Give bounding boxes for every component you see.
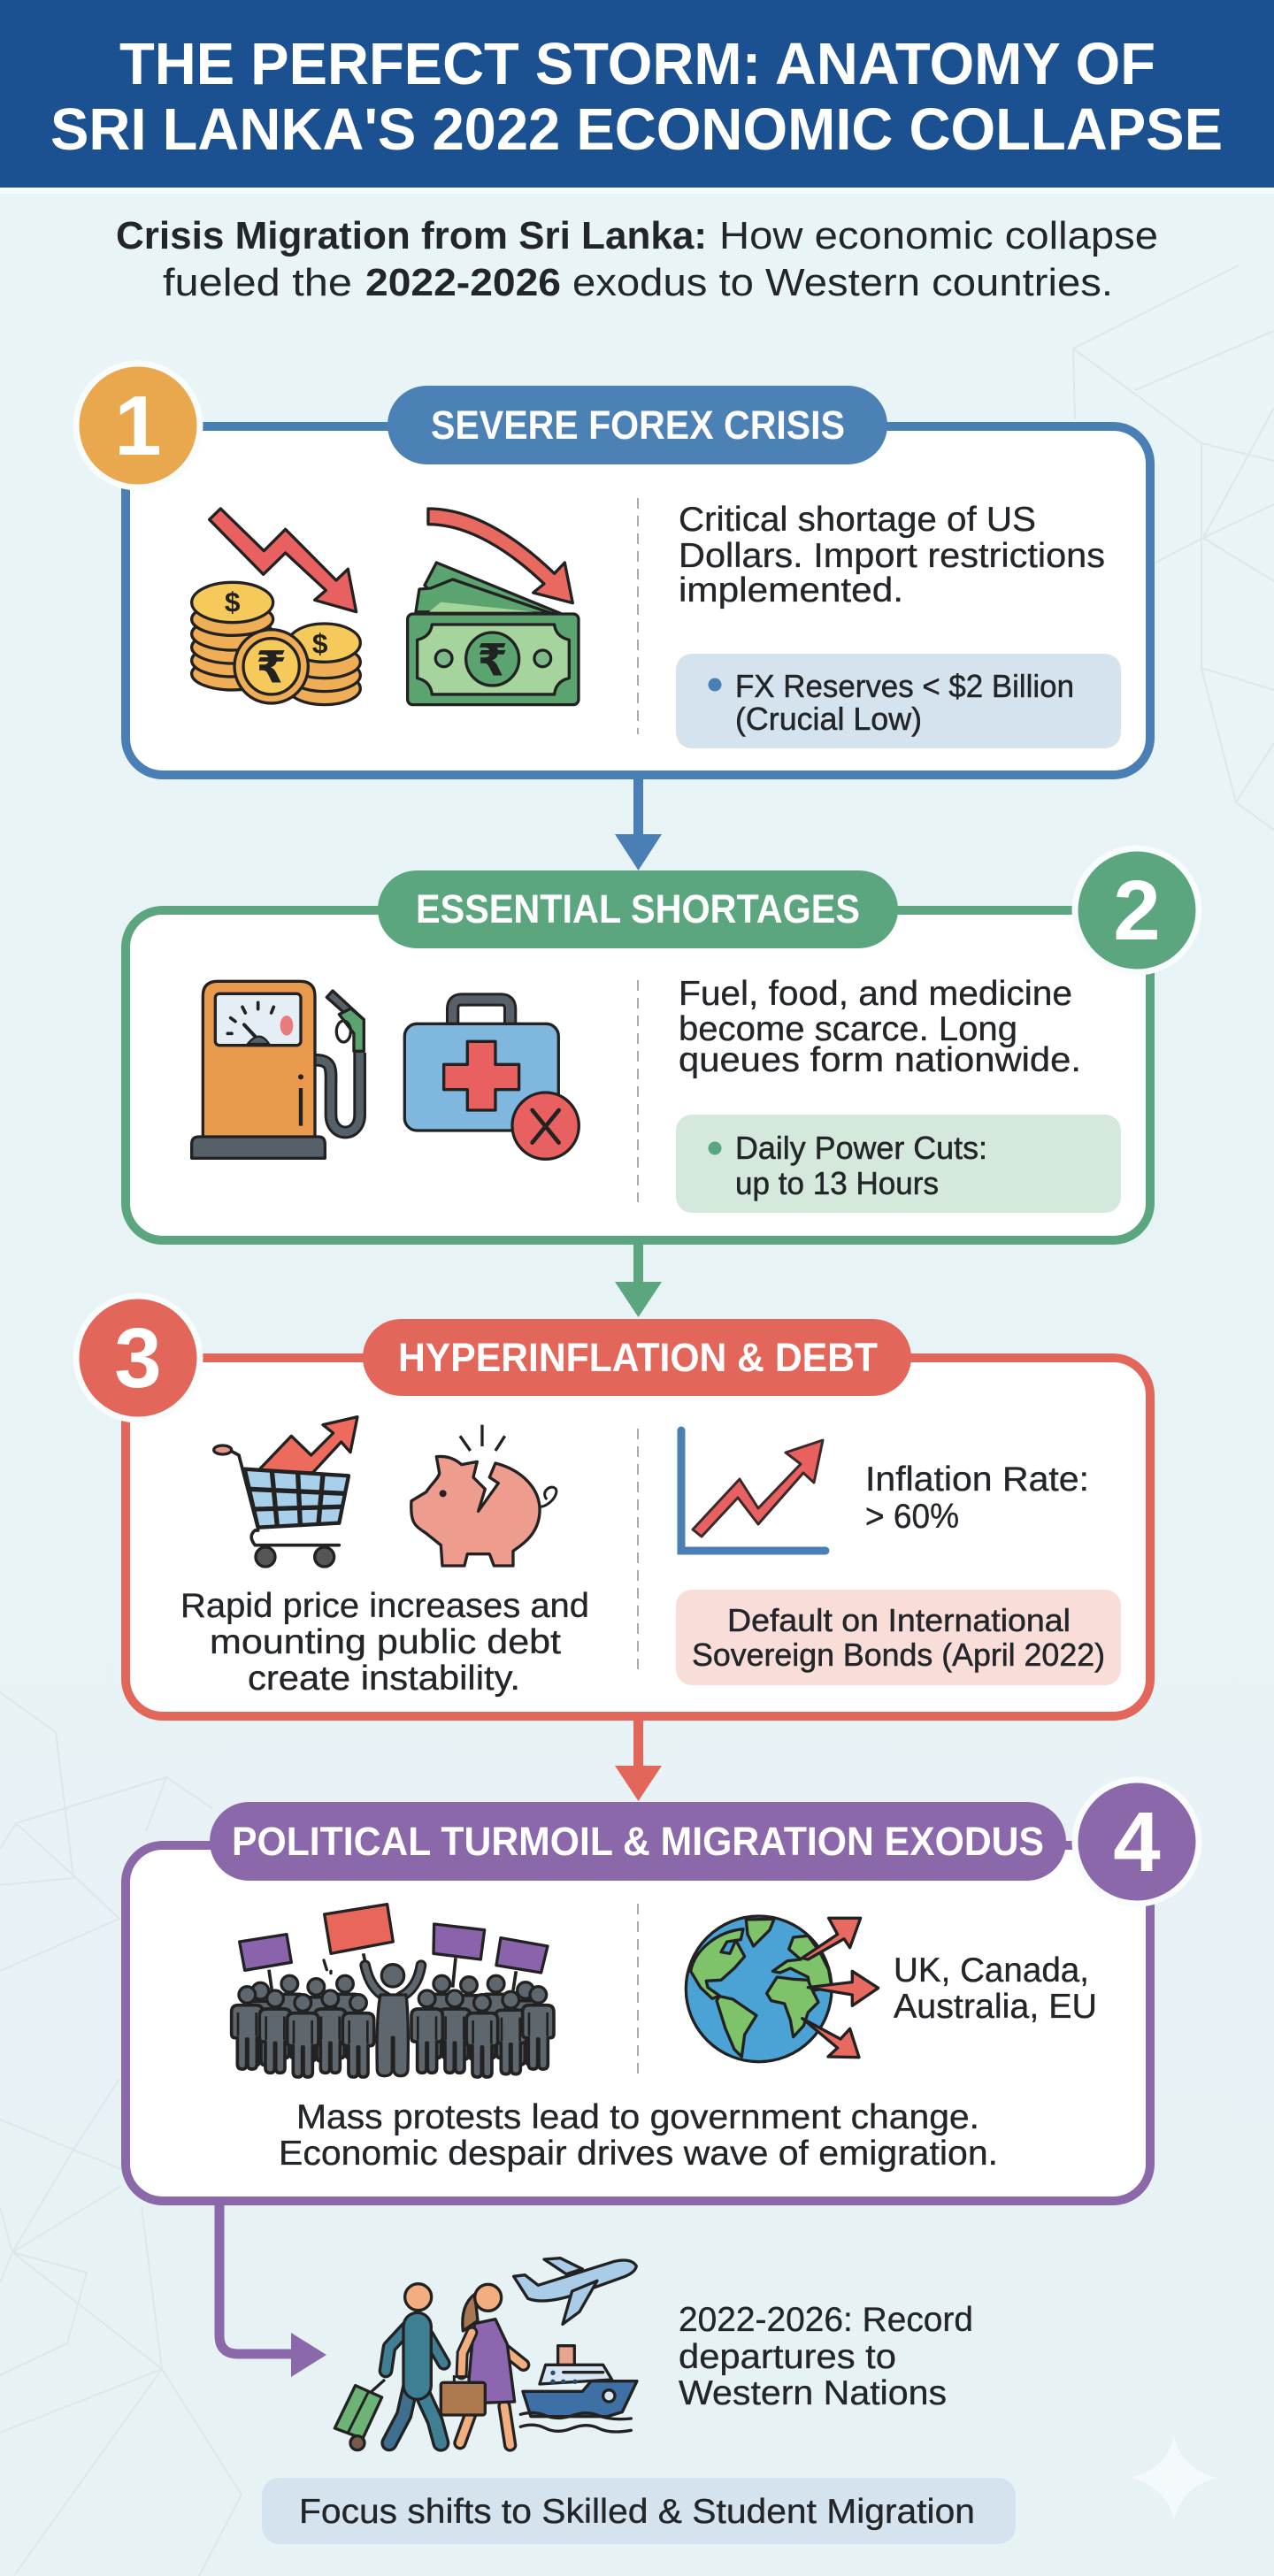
man bbox=[386, 2327, 444, 2443]
stat box: power cuts bbox=[676, 1115, 1121, 1213]
arrow: panel 1 to panel 2 bbox=[615, 777, 662, 870]
panel 3 heading pill: HYPERINFLATION & DEBT bbox=[398, 1335, 878, 1380]
panel 1 heading pill bbox=[388, 386, 887, 464]
subtitle: fueled the bbox=[163, 261, 352, 304]
icon: medical kit with cross-out bbox=[404, 1000, 579, 1159]
panel 4 description: Economic despair drives wave of emigration. bbox=[279, 2135, 998, 2173]
panel 2: essential shortages bbox=[126, 848, 1199, 1240]
panel 3 heading pill bbox=[363, 1319, 911, 1396]
divider bbox=[637, 980, 639, 1202]
arrow: panel 3 to panel 4 bbox=[615, 1718, 662, 1801]
icon: broken piggy bank bbox=[411, 1425, 556, 1566]
green suitcase bbox=[334, 2380, 385, 2450]
ship bbox=[520, 2346, 637, 2432]
icon: falling banknotes: ₹ bbox=[477, 635, 508, 685]
icon: shopping cart with rising arrow bbox=[214, 1417, 357, 1567]
subtitle: Crisis Migration from Sri Lanka: bbox=[116, 214, 707, 257]
stat box: sovereign default bbox=[676, 1590, 1121, 1685]
inflation rate label: Inflation Rate: bbox=[865, 1460, 1089, 1499]
panel 2 description bbox=[679, 975, 1081, 1079]
callout: skilled and student migration bbox=[262, 2478, 1016, 2544]
departures caption: departures to bbox=[679, 2338, 896, 2376]
stat box: FX reserves bbox=[676, 654, 1121, 748]
stat box: power cuts: Daily Power Cuts: bbox=[735, 1130, 987, 1166]
panel 4 description: Mass protests lead to government change. bbox=[296, 2098, 979, 2136]
panel 4 description bbox=[279, 2098, 998, 2173]
departures caption: 2022-2026: Record bbox=[679, 2301, 973, 2339]
departures caption: Western Nations bbox=[679, 2374, 947, 2412]
divider bbox=[637, 498, 639, 734]
icon: falling coins bbox=[192, 509, 360, 705]
header banner bbox=[0, 0, 1274, 194]
panel 1 description: Dollars. Import restrictions bbox=[679, 537, 1105, 575]
subtitle: 2022-2026 bbox=[365, 261, 561, 304]
panel 1 description: implemented. bbox=[679, 571, 903, 610]
destination countries bbox=[894, 1951, 1097, 2026]
briefcase bbox=[454, 2377, 469, 2382]
subtitle bbox=[116, 214, 1158, 304]
panel 2 heading pill bbox=[378, 870, 898, 948]
callout: skilled and student migration: Focus shifts to Skilled & Student Migration bbox=[299, 2493, 975, 2531]
stat box: FX reserves: (Crucial Low) bbox=[735, 701, 922, 737]
divider bbox=[637, 1429, 639, 1670]
destination countries: UK, Canada, bbox=[894, 1951, 1089, 1990]
stat box: sovereign default: Default on International bbox=[727, 1602, 1071, 1638]
panel 3 description: mounting public debt bbox=[210, 1623, 561, 1661]
badge 4: 4 bbox=[1113, 1795, 1161, 1890]
stat box: sovereign default: Sovereign Bonds (April 2022) bbox=[692, 1637, 1105, 1673]
title bbox=[50, 31, 1223, 163]
badge 1: 1 bbox=[114, 379, 162, 473]
line chart: rising inflation bbox=[681, 1430, 825, 1551]
panel 3 description: create instability. bbox=[248, 1660, 520, 1698]
arrow: panel 4 to departures bbox=[219, 2203, 326, 2377]
badge 4 bbox=[1075, 1780, 1199, 1904]
destination countries: Australia, EU bbox=[894, 1988, 1097, 2026]
panel 2 description: become scarce. Long bbox=[679, 1010, 1017, 1048]
panel 1 frame bbox=[126, 426, 1150, 775]
panel 2 description: Fuel, food, and medicine bbox=[679, 975, 1072, 1013]
panel 3 description bbox=[180, 1587, 589, 1698]
badge 3: 3 bbox=[114, 1311, 162, 1406]
subtitle: exodus to Western countries. bbox=[572, 261, 1113, 304]
icon: protest crowd bbox=[232, 1905, 554, 2077]
badge 3 bbox=[76, 1296, 200, 1420]
woman bbox=[463, 2294, 478, 2331]
stat box: power cuts: up to 13 Hours bbox=[735, 1165, 939, 1201]
icon: sparkle bbox=[1132, 2436, 1216, 2520]
panel 1 description: Critical shortage of US bbox=[679, 501, 1036, 539]
icon: globe with outgoing arrows bbox=[686, 1916, 879, 2062]
panel 2 heading pill: ESSENTIAL SHORTAGES bbox=[416, 886, 860, 932]
panel 1 heading pill: SEVERE FOREX CRISIS bbox=[431, 402, 845, 448]
plane bbox=[514, 2258, 636, 2324]
panel 4 heading pill bbox=[210, 1802, 1066, 1881]
arrow: panel 2 to panel 3 bbox=[615, 1238, 662, 1317]
panel 1: severe forex crisis bbox=[76, 364, 1150, 775]
panel 4 frame bbox=[126, 1845, 1150, 2201]
panel 2 description: queues form nationwide. bbox=[679, 1041, 1081, 1079]
panel 3: hyperinflation and debt bbox=[76, 1296, 1150, 1716]
icon: falling coins: ₹ bbox=[256, 643, 287, 693]
inflation rate label: > 60% bbox=[865, 1498, 959, 1536]
panel 1 description bbox=[679, 501, 1105, 610]
panel 2 frame bbox=[126, 910, 1150, 1240]
title: SRI LANKA'S 2022 ECONOMIC COLLAPSE bbox=[50, 96, 1223, 163]
divider bbox=[637, 1904, 639, 2081]
badge 1 bbox=[76, 364, 200, 487]
icon: falling coins: $ bbox=[312, 627, 328, 659]
panel 3 description: Rapid price increases and bbox=[180, 1587, 589, 1625]
title: THE PERFECT STORM: ANATOMY OF bbox=[119, 31, 1155, 97]
departures caption bbox=[679, 2301, 973, 2412]
subtitle: How economic collapse bbox=[719, 214, 1158, 257]
panel 4: political turmoil and migration exodus bbox=[126, 1780, 1199, 2201]
badge 2: 2 bbox=[1113, 863, 1161, 958]
stat box: FX reserves: FX Reserves < $2 Billion bbox=[735, 668, 1074, 704]
icon: fuel pump bbox=[192, 981, 364, 1158]
panel 3 frame bbox=[126, 1358, 1150, 1716]
panel 4 heading pill: POLITICAL TURMOIL & MIGRATION EXODUS bbox=[232, 1819, 1044, 1864]
icon: falling banknotes bbox=[408, 509, 579, 705]
icon: falling coins: $ bbox=[225, 586, 241, 618]
icon: travellers with plane and ship bbox=[334, 2258, 637, 2450]
badge 2 bbox=[1075, 848, 1199, 972]
inflation rate label bbox=[865, 1460, 1089, 1536]
